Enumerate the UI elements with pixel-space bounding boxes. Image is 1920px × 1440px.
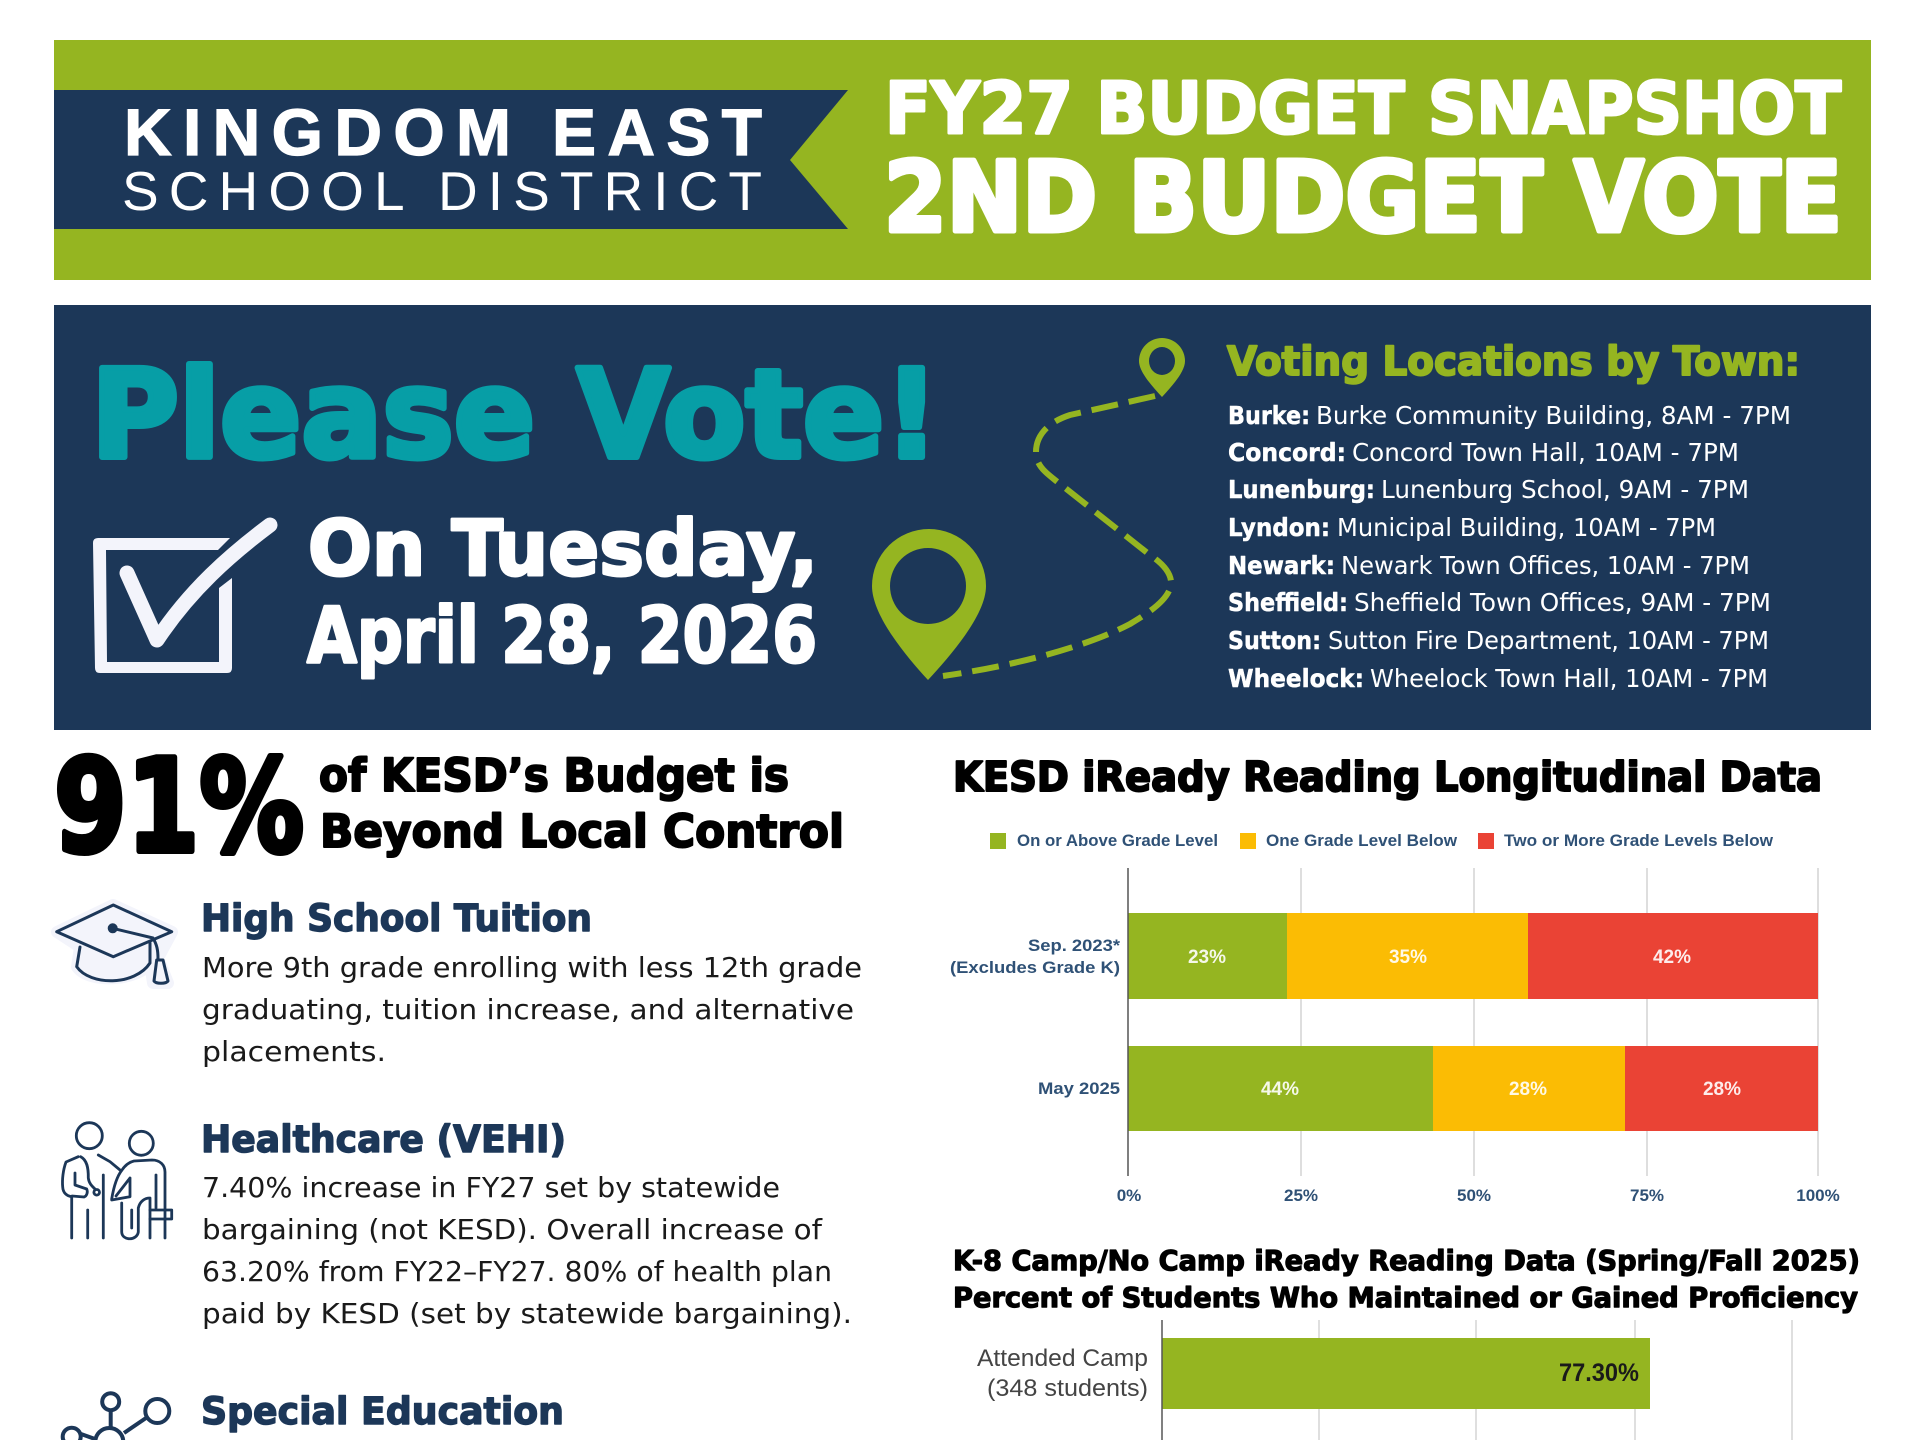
voting locations list: Sheffield: <box>1228 588 1348 617</box>
voting locations list: Sutton Fire Department, 10AM - 7PM <box>1328 626 1769 655</box>
y axis labels: Sep. 2023* <box>1028 936 1120 955</box>
item: healthcare: Healthcare (VEHI) <box>201 1118 566 1161</box>
date: On Tuesday, <box>308 505 818 594</box>
bar: attended camp: 77.30% <box>1559 1359 1639 1387</box>
voting locations list <box>1228 401 1791 693</box>
y axis labels: (Excludes Grade K) <box>950 958 1120 977</box>
panel: longitudinal chart <box>950 753 1840 1205</box>
x axis labels: 0% <box>1117 1186 1141 1205</box>
legend: On or Above Grade Level <box>1017 831 1218 850</box>
bar: sep 2023: 42% <box>1653 947 1691 968</box>
voting locations list: Lunenburg: <box>1228 475 1375 504</box>
title <box>884 67 1842 254</box>
bar: sep 2023 <box>1128 913 1818 999</box>
x axis labels: 75% <box>1630 1186 1664 1205</box>
panel: budget beyond local control <box>54 733 862 1440</box>
item: high school tuition: High School Tuition <box>201 897 592 940</box>
voting locations list: Concord: <box>1228 438 1346 467</box>
category label <box>977 1345 1148 1402</box>
chart heading: K-8 Camp/No Camp iReady Reading Data (Spring/Fall 2025) <box>953 1244 1860 1277</box>
icon: graduation cap <box>57 905 172 983</box>
chart title: KESD iReady Reading Longitudinal Data <box>953 753 1822 801</box>
legend: Two or More Grade Levels Below <box>1504 831 1774 850</box>
item: healthcare: 7.40% increase in FY27 set by statewide <box>202 1171 780 1204</box>
chart heading <box>953 1244 1860 1314</box>
date <box>307 505 818 681</box>
bar: attended camp <box>1162 1338 1650 1409</box>
item: high school tuition: graduating, tuition increase, and alternative <box>202 993 854 1026</box>
item: healthcare: paid by KESD (set by statewide bargaining). <box>202 1297 852 1330</box>
budget heading <box>319 749 844 858</box>
voting locations list: Concord Town Hall, 10AM - 7PM <box>1352 438 1739 467</box>
x axis labels: 100% <box>1796 1186 1840 1205</box>
title: FY27 BUDGET SNAPSHOT <box>885 67 1842 150</box>
bar: sep 2023: 35% <box>1389 947 1427 968</box>
bar: may 2025: 44% <box>1261 1079 1299 1100</box>
voting locations heading: Voting Locations by Town: <box>1227 339 1800 385</box>
item: healthcare <box>201 1118 852 1330</box>
item: high school tuition <box>201 897 862 1068</box>
header banner <box>54 40 1871 280</box>
voting locations list: Lyndon: <box>1228 513 1330 542</box>
stacked bar chart <box>950 868 1840 1205</box>
item: high school tuition: placements. <box>202 1035 386 1068</box>
x axis labels <box>1117 1186 1840 1205</box>
icon: dashed route with pins <box>872 338 1185 680</box>
y axis labels <box>950 936 1120 1098</box>
date: April 28, 2026 <box>307 592 817 681</box>
voting locations list: Wheelock Town Hall, 10AM - 7PM <box>1370 664 1768 693</box>
x axis labels: 25% <box>1284 1186 1318 1205</box>
voting locations list: Sutton: <box>1228 626 1321 655</box>
bar: may 2025: 28% <box>1703 1079 1741 1100</box>
voting locations list: Newark Town Offices, 10AM - 7PM <box>1341 551 1750 580</box>
item: healthcare: bargaining (not KESD). Overall increase of <box>202 1213 823 1246</box>
voting locations list: Burke Community Building, 8AM - 7PM <box>1316 401 1791 430</box>
voting locations list: Burke: <box>1228 401 1310 430</box>
item: high school tuition: More 9th grade enrolling with less 12th grade <box>202 951 862 984</box>
chart heading: Percent of Students Who Maintained or Gained Proficiency <box>953 1281 1858 1314</box>
panel: please vote <box>54 305 1871 730</box>
district name ribbon: SCHOOL DISTRICT <box>122 160 762 222</box>
bar: may 2025: 28% <box>1509 1079 1547 1100</box>
icon: healthcare people <box>62 1123 172 1239</box>
legend: One Grade Level Below <box>1266 831 1458 850</box>
icon: checkbox <box>93 525 270 673</box>
voting locations list: Lunenburg School, 9AM - 7PM <box>1381 475 1749 504</box>
category label: Attended Camp <box>977 1345 1148 1372</box>
voting locations list: Wheelock: <box>1228 664 1364 693</box>
item: healthcare: 63.20% from FY22–FY27. 80% of health plan <box>202 1255 832 1288</box>
voting locations list: Newark: <box>1228 551 1335 580</box>
x axis labels: 50% <box>1457 1186 1491 1205</box>
budget heading: Beyond Local Control <box>320 805 844 858</box>
bar: may 2025 <box>1128 1046 1818 1131</box>
y axis labels: May 2025 <box>1038 1079 1120 1098</box>
big number 91%: 91% <box>54 733 304 882</box>
voting locations list: Sheffield Town Offices, 9AM - 7PM <box>1354 588 1771 617</box>
icon: special education network <box>63 1393 169 1440</box>
voting locations list: Municipal Building, 10AM - 7PM <box>1337 513 1716 542</box>
category label: (348 students) <box>987 1375 1148 1402</box>
legend <box>990 831 1774 850</box>
panel: camp chart <box>953 1244 1860 1440</box>
horizontal bar chart <box>977 1320 1792 1440</box>
bar: sep 2023: 23% <box>1188 947 1226 968</box>
budget heading: of KESD’s Budget is <box>319 749 789 802</box>
item: special education: Special Education <box>201 1390 564 1433</box>
district name ribbon: KINGDOM EAST <box>124 95 762 169</box>
heading: please vote: Please Vote! <box>91 344 939 486</box>
title: 2ND BUDGET VOTE <box>884 141 1842 254</box>
district name ribbon <box>54 90 848 229</box>
